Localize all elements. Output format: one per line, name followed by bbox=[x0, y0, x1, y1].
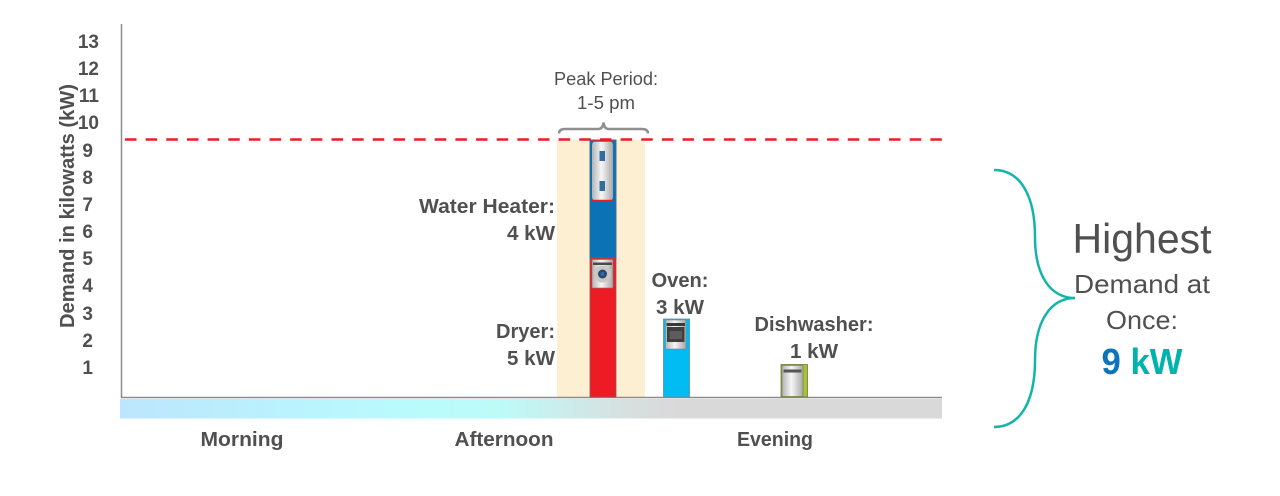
peak period bracket bbox=[559, 122, 648, 134]
callout: highest demand: Highest bbox=[1072, 215, 1212, 262]
peak demand dashed line bbox=[125, 138, 942, 141]
dryer label: 5 kW bbox=[507, 348, 555, 370]
oven label: 3 kW bbox=[656, 297, 704, 319]
y-axis tick labels: 9 bbox=[82, 141, 93, 162]
callout: highest demand: 9 kW bbox=[1102, 341, 1183, 382]
dishwasher label: 1 kW bbox=[790, 341, 838, 363]
y-axis tick labels: 10 bbox=[78, 113, 99, 134]
time labels bbox=[200, 429, 813, 451]
time of day gradient band bbox=[120, 399, 942, 418]
y-axis tick labels: 8 bbox=[82, 168, 93, 189]
oven label: Oven: bbox=[652, 270, 708, 292]
y-axis title: Demand in kilowatts (kW) bbox=[57, 84, 79, 328]
icon: dryer bbox=[592, 260, 613, 288]
time labels: Afternoon bbox=[454, 429, 554, 451]
y-axis tick labels: 6 bbox=[82, 222, 93, 243]
time labels: Evening bbox=[737, 429, 813, 451]
dryer bar, 5 kW bbox=[590, 258, 616, 397]
y-axis tick labels: 7 bbox=[82, 195, 93, 216]
peak period shaded band bbox=[557, 140, 645, 397]
dryer label: Dryer: bbox=[496, 321, 555, 343]
icon: dishwasher bbox=[782, 366, 803, 396]
peak period label: Peak Period: bbox=[554, 69, 658, 89]
callout: highest demand bbox=[1072, 215, 1212, 382]
axes bbox=[121, 24, 942, 398]
callout: highest demand: Demand at bbox=[1074, 269, 1211, 299]
dishwasher bar, 1 kW bbox=[781, 364, 808, 397]
icon: oven bbox=[666, 320, 686, 349]
y-axis tick labels: 11 bbox=[79, 86, 99, 107]
water heater label: Water Heater: bbox=[419, 196, 555, 218]
callout: highest demand: Once: bbox=[1106, 305, 1178, 335]
y-axis tick labels: 4 bbox=[82, 276, 93, 297]
y-axis tick labels: 5 bbox=[82, 249, 93, 270]
time labels: Morning bbox=[200, 429, 284, 451]
icon: water heater bbox=[592, 141, 613, 201]
teal curly brace bbox=[994, 170, 1075, 427]
water heater label: 4 kW bbox=[507, 223, 555, 245]
y-axis tick labels: 3 bbox=[82, 304, 93, 325]
water heater label bbox=[419, 196, 555, 245]
y-axis tick labels: 12 bbox=[78, 59, 99, 80]
dishwasher label: Dishwasher: bbox=[754, 314, 874, 336]
y-axis tick labels: 13 bbox=[78, 32, 99, 53]
dryer label bbox=[496, 321, 555, 370]
y-axis tick labels: 2 bbox=[82, 331, 93, 352]
y-axis tick labels bbox=[78, 32, 99, 379]
dishwasher label bbox=[754, 314, 874, 363]
y-axis tick labels: 1 bbox=[82, 358, 93, 379]
water heater bar, 4 kW bbox=[590, 140, 616, 258]
oven bar, 3 kW bbox=[664, 319, 690, 397]
oven label bbox=[652, 270, 708, 319]
peak period label bbox=[554, 69, 658, 113]
peak period label: 1-5 pm bbox=[577, 93, 635, 113]
